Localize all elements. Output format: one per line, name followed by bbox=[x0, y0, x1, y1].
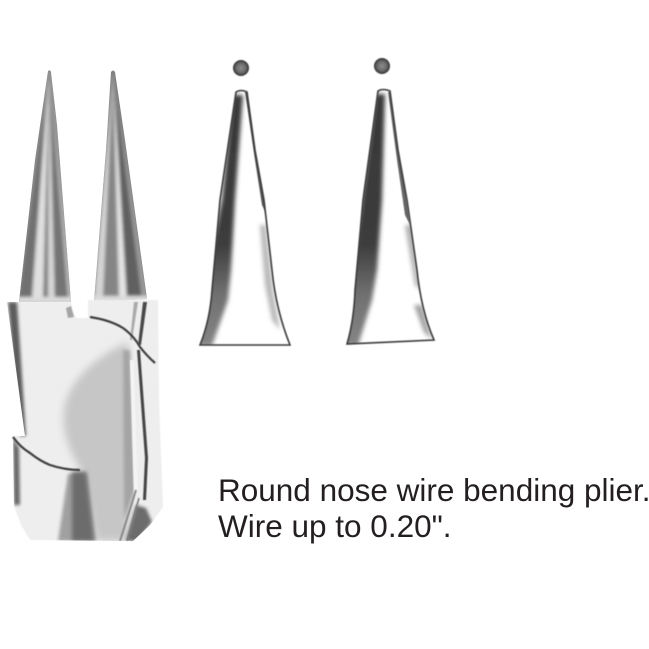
tip cross-section dot right bbox=[374, 58, 390, 74]
body curve lines bbox=[90, 317, 155, 363]
tip profile left bbox=[196, 90, 290, 346]
caption text: Wire up to 0.20". bbox=[218, 508, 452, 544]
right jaw cone bbox=[94, 70, 147, 300]
tip profile right bbox=[344, 90, 434, 346]
caption text bbox=[218, 472, 649, 544]
notch detail bbox=[66, 306, 74, 318]
plier body bbox=[7, 300, 163, 541]
plier: left and right jaws with body bbox=[7, 65, 163, 541]
caption text: Round nose wire bending plier. bbox=[218, 472, 649, 508]
tip cross-section dot left bbox=[233, 60, 249, 76]
left jaw cone bbox=[19, 70, 71, 302]
